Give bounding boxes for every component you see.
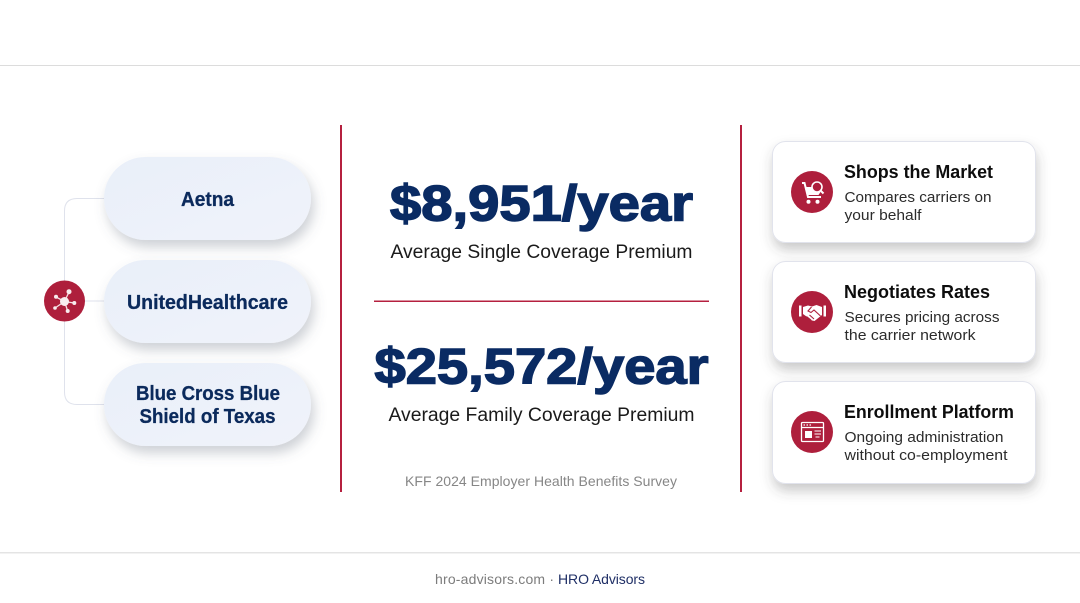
footer: hro-advisors.com · <box>435 571 554 587</box>
stat: family premium: $25,572/year <box>374 338 708 394</box>
source note: KFF 2024 Employer Health Benefits Survey <box>405 473 677 489</box>
panel: services <box>772 142 1036 484</box>
divider: left red rule <box>340 125 342 492</box>
card text: Ongoing administration <box>844 430 1004 446</box>
panel: premiums <box>374 176 709 489</box>
pill: UnitedHealthcare <box>104 260 311 343</box>
card text: without co-employment <box>843 448 1008 464</box>
pill: Aetna <box>104 157 311 240</box>
icon: browser window <box>791 411 833 453</box>
card title: Shops the Market <box>844 162 993 182</box>
card text: the carrier network <box>844 328 976 344</box>
card title: Enrollment Platform <box>844 402 1014 422</box>
panel: carriers <box>44 157 311 446</box>
icon: handshake <box>791 291 833 333</box>
card: Enrollment Platform <box>772 382 1036 484</box>
label: single premium: Average Single Coverage Premium <box>390 242 692 263</box>
pill: Blue Cross Blue Shield of Texas <box>104 363 311 446</box>
card text: Secures pricing across <box>844 310 1000 326</box>
card title: Negotiates Rates <box>844 282 990 302</box>
card text <box>844 190 992 224</box>
label: family premium: Average Family Coverage Premium <box>388 405 694 426</box>
card: Negotiates Rates <box>772 262 1036 362</box>
stat: single premium: $8,951/year <box>390 176 693 232</box>
card text <box>844 310 1000 344</box>
icon: network hub <box>44 280 85 322</box>
card text: your behalf <box>844 208 923 224</box>
pill: Aetna: Aetna <box>181 189 235 211</box>
pill: UnitedHealthcare: UnitedHealthcare <box>127 292 288 314</box>
connector lines <box>64 198 104 404</box>
card text: Compares carriers on <box>844 190 992 206</box>
pill: Blue Cross Blue Shield of Texas: Blue Cross Blue <box>136 383 280 405</box>
footer <box>435 571 645 587</box>
divider: right red rule <box>740 125 742 492</box>
footer: HRO Advisors <box>558 571 645 587</box>
card: Shops the Market <box>772 142 1036 242</box>
icon: cart with magnifier <box>791 171 833 213</box>
pill: Blue Cross Blue Shield of Texas: Shield of Texas <box>140 406 276 428</box>
card text <box>843 430 1008 464</box>
divider: center <box>374 300 709 302</box>
